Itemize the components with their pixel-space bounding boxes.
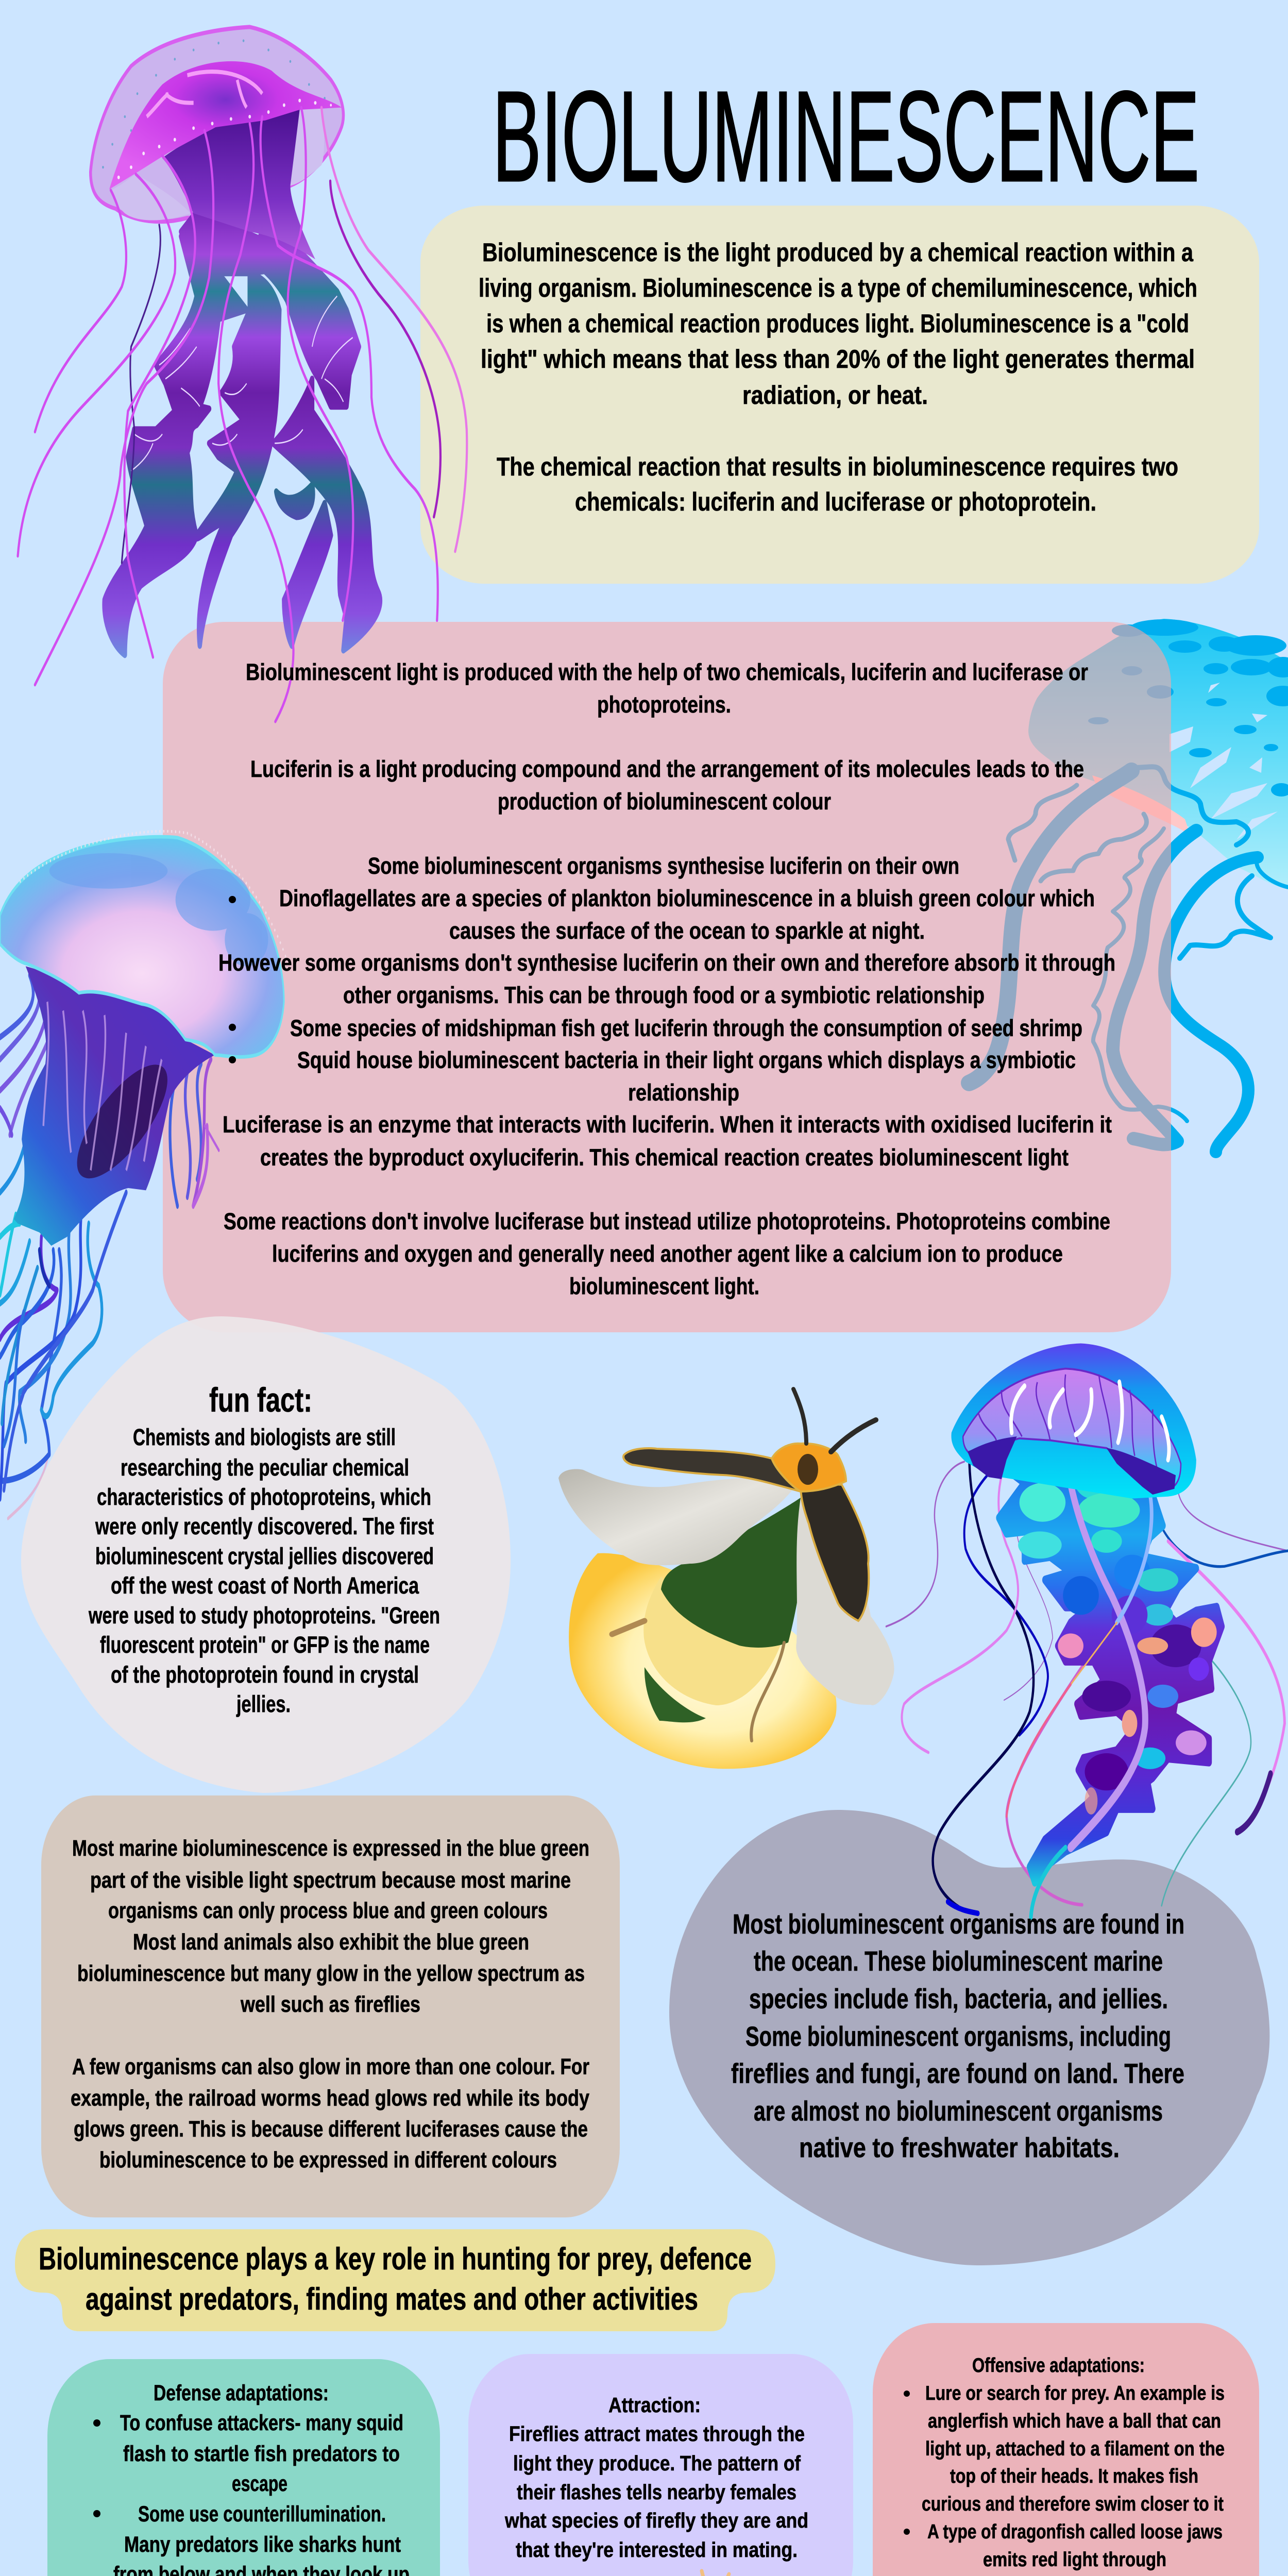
halo <box>20 831 286 957</box>
panel: chemistry text: photoproteins. <box>597 691 731 718</box>
fun fact text: were only recently discovered. The first <box>95 1513 434 1539</box>
fun fact text: bioluminescent crystal jellies discovered <box>95 1543 434 1569</box>
white streaks <box>1011 1382 1169 1460</box>
right grey wing <box>796 1498 894 1705</box>
panel: chemistry text: Squid house bioluminescent bacteria in their light organs which displays a symbiotic <box>297 1047 1076 1073</box>
illustration: purple jellyfish <box>18 27 467 722</box>
intro background <box>420 206 1259 584</box>
panel: chemistry text: production of bioluminescent colour <box>498 788 831 815</box>
defense text <box>93 2381 410 2576</box>
spectrum text: Most marine bioluminescence is expressed in the blue green <box>72 1836 589 1861</box>
offensive text: Offensive adaptations: <box>972 2354 1145 2377</box>
fun fact text: off the west coast of North America <box>111 1572 419 1599</box>
fun fact text: were used to study photoproteins. "Green <box>88 1602 440 1629</box>
panel: ocean organisms text: species include fish, bacteria, and jellies. <box>749 1984 1168 2014</box>
attraction text: what species of firefly they are and <box>504 2509 808 2532</box>
lower tentacles <box>0 975 219 1518</box>
defense text: To confuse attackers- many squid <box>120 2411 403 2435</box>
left fringes <box>0 975 33 1037</box>
attraction text: light they produce. The pattern of <box>513 2451 801 2475</box>
panel: ocean organisms background <box>669 1810 1269 2265</box>
fun fact text: jellies. <box>236 1691 291 1717</box>
offensive background <box>873 2323 1259 2576</box>
panel: chemistry text: relationship <box>628 1079 739 1106</box>
spectrum text: Most land animals also exhibit the blue green <box>133 1929 529 1955</box>
pocket outlines <box>978 1375 1158 1471</box>
offensive text: anglerfish which have a ball that can <box>928 2410 1221 2432</box>
panel: ocean organisms text: fireflies and fungi, are found on land. There <box>731 2058 1184 2089</box>
small green segment <box>645 1667 706 1722</box>
attraction text: Attraction: <box>608 2393 701 2417</box>
spectrum text <box>71 1836 589 2173</box>
intro text: chemicals: luciferin and luciferase or photoprotein. <box>575 487 1096 516</box>
body <box>994 1444 1222 1883</box>
fun fact text <box>88 1424 440 1717</box>
panel: intro <box>420 206 1259 584</box>
bell speckles <box>102 39 326 168</box>
panel: chemistry text <box>218 659 1115 1299</box>
illustration: firefly <box>558 1389 894 1769</box>
offensive text: top of their heads. It makes fish <box>950 2465 1198 2487</box>
panel: ocean organisms text: native to freshwater habitats. <box>799 2132 1120 2163</box>
banner text: Bioluminescence plays a key role in hunting for prey, defence <box>39 2242 752 2276</box>
inner belly <box>643 1577 781 1705</box>
panel: offensive adaptations <box>873 2323 1259 2576</box>
banner shape <box>15 2229 775 2331</box>
attraction text: that they're interested in mating. <box>516 2538 798 2562</box>
intro text <box>479 238 1197 516</box>
dark under bell <box>162 110 315 259</box>
left grey wing <box>558 1469 796 1565</box>
inner dome <box>109 61 342 190</box>
bell <box>951 1344 1196 1499</box>
arm feather lines <box>131 296 353 471</box>
illustration: blue purple jellyfish <box>0 831 286 1518</box>
head marking <box>798 1454 818 1485</box>
bell interior <box>963 1368 1181 1487</box>
offensive text <box>904 2354 1229 2576</box>
panel: fun fact <box>21 1316 511 1793</box>
attraction text: their flashes tells nearby females <box>517 2480 796 2504</box>
panel: light spectrum <box>41 1795 620 2217</box>
outer bell <box>91 27 343 222</box>
offensive text: curious and therefore swim closer to it <box>922 2493 1224 2515</box>
fun fact text: researching the peculiar chemical <box>121 1454 409 1481</box>
body <box>14 967 215 1246</box>
illustration: iridescent jellyfish <box>886 1344 1288 1917</box>
oral arms <box>105 215 380 655</box>
body highlights <box>995 1444 1217 1815</box>
attraction text <box>504 2393 808 2562</box>
panel: defense adaptations <box>47 2359 440 2576</box>
fun fact blob <box>21 1316 511 1793</box>
panel: chemistry text: Some reactions don't involve luciferase but instead utilize photoproteins. Photoproteins combine <box>224 1208 1110 1234</box>
green wing case <box>661 1498 804 1648</box>
right under-bell lobe <box>290 108 324 185</box>
defense text: Defense adaptations: <box>154 2381 329 2405</box>
offensive text: emits red light through <box>983 2549 1166 2571</box>
panel: chemistry text: causes the surface of the ocean to sparkle at night. <box>449 918 925 944</box>
banner: key role heading <box>15 2229 775 2331</box>
banner text: against predators, finding mates and other activities <box>86 2282 698 2316</box>
spectrum background <box>41 1795 620 2217</box>
left under-bell lobe <box>111 174 191 221</box>
body strands <box>43 1002 162 1171</box>
fun fact heading: fun fact: <box>209 1381 312 1419</box>
panel: chemistry text: other organisms. This can be through food or a symbiotic relationship <box>343 982 985 1008</box>
defense text: Many predators like sharks hunt <box>124 2532 401 2557</box>
panel: attraction <box>468 2354 853 2576</box>
spectrum text: part of the visible light spectrum because most marine <box>90 1868 571 1893</box>
offensive text: Lure or search for prey. An example is <box>925 2382 1225 2404</box>
offensive text: light up, attached to a filament on the <box>925 2438 1225 2460</box>
illustration: anglerfish <box>513 2571 776 2576</box>
dome streaks <box>147 72 262 116</box>
panel: chemistry text: Luciferin is a light producing compound and the arrangement of its molecules leads to the <box>250 756 1084 782</box>
bell <box>0 837 284 1057</box>
panel: chemistry text: However some organisms don't synthesise luciferin on their own and therefore absorb it through <box>218 950 1115 976</box>
rim dots <box>117 99 332 179</box>
dark wing upper <box>623 1448 801 1492</box>
defense text: flash to startle fish predators to <box>123 2442 400 2466</box>
dark core <box>71 1042 174 1200</box>
fun fact text: Chemists and biologists are still <box>133 1424 396 1450</box>
head <box>772 1444 846 1492</box>
fun fact text: characteristics of photoproteins, which <box>97 1484 431 1510</box>
intro text: radiation, or heat. <box>742 381 928 410</box>
panel: chemistry text: Bioluminescent light is produced with the help of two chemicals, luciferin and luciferase or <box>246 659 1088 685</box>
spectrum text: bioluminescence but many glow in the yellow spectrum as <box>77 1961 585 1986</box>
panel: chemistry text: Some species of midshipman fish get luciferin through the consumption of seed shrimp <box>290 1015 1082 1041</box>
defense background <box>47 2359 440 2576</box>
panel: chemistry text: Some bioluminescent organisms synthesise luciferin on their own <box>368 853 959 879</box>
panel: chemistry text: bioluminescent light. <box>569 1273 759 1299</box>
panel: ocean organisms text <box>731 1909 1184 2163</box>
spectrum text: example, the railroad worms head glows red while its body <box>71 2086 589 2111</box>
spectrum text: well such as fireflies <box>240 1992 420 2017</box>
skirt <box>968 1436 1176 1495</box>
tentacles <box>18 108 467 722</box>
spectrum text: glows green. This is because different luciferases cause the <box>74 2116 588 2142</box>
panel: chemistry text: Dinoflagellates are a species of plankton bioluminescence in a bluish green colour which <box>279 885 1095 911</box>
glowing abdomen <box>569 1553 837 1769</box>
antennae <box>793 1389 876 1452</box>
legs <box>612 1621 784 1741</box>
offensive text: A type of dragonfish called loose jaws <box>927 2521 1223 2543</box>
thin tentacles <box>886 1444 1288 1913</box>
center ribbons <box>1007 1452 1151 1917</box>
spectrum text: bioluminescence to be expressed in different colours <box>99 2147 557 2173</box>
illustration: neon blue jellyfish <box>969 619 1288 1152</box>
fun fact text: of the photoprotein found in crystal <box>111 1662 419 1688</box>
attraction background <box>468 2354 853 2576</box>
panel: chemistry text: Luciferase is an enzyme that interacts with luciferin. When it interacts with oxidised luciferin it <box>223 1111 1112 1138</box>
defense text: escape <box>232 2471 287 2496</box>
panel: chemistry text: creates the byproduct oxyluciferin. This chemical reaction creates bioluminescent light <box>260 1144 1069 1171</box>
spectrum text: organisms can only process blue and green colours <box>108 1898 548 1923</box>
lure rays <box>681 2571 740 2576</box>
dark wing right <box>801 1485 869 1621</box>
panel: ocean organisms text: are almost no bioluminescent organisms <box>754 2096 1163 2127</box>
attraction text: Fireflies attract mates through the <box>509 2422 805 2446</box>
panel: ocean organisms text: the ocean. These bioluminescent marine <box>754 1946 1163 1977</box>
spectrum text: A few organisms can also glow in more than one colour. For <box>72 2054 589 2079</box>
panel: chemistry background <box>163 622 1171 1332</box>
bell patches <box>49 853 268 967</box>
right fringes <box>170 1073 177 1206</box>
defense text: Some use counterillumination. <box>138 2502 386 2527</box>
fun fact text: fluorescent protein" or GFP is the name <box>100 1632 430 1658</box>
banner text <box>39 2242 752 2316</box>
panel: chemistry text: luciferins and oxygen and generally need another agent like a calcium ion to produce <box>272 1241 1063 1267</box>
